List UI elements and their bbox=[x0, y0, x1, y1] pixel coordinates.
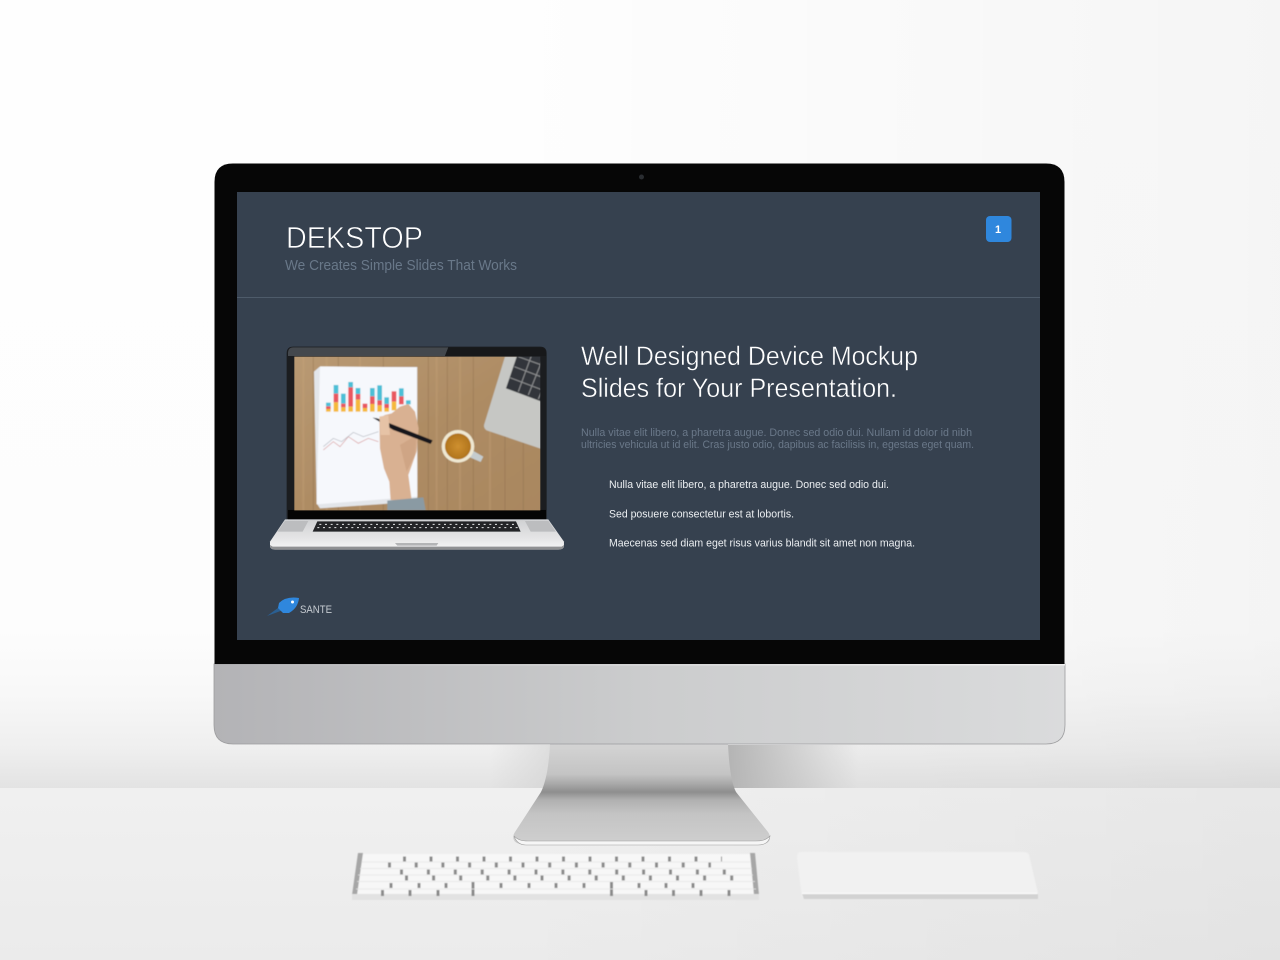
laptop lid bbox=[287, 347, 547, 519]
wireless keyboard bbox=[352, 853, 759, 900]
trackpad bbox=[797, 852, 1038, 899]
line chart bbox=[323, 437, 378, 450]
intro paragraph: ultricies vehicula ut id elit. Cras justo odio, dapibus ac facilisis in, egestas eget quam. bbox=[581, 439, 974, 451]
webcam bbox=[639, 174, 644, 180]
trackpad surface bbox=[797, 852, 1038, 897]
stand body bbox=[513, 744, 770, 844]
feature list bbox=[609, 479, 915, 550]
keyboard edge strips bbox=[352, 853, 759, 895]
photo on laptop screen bbox=[290, 353, 543, 513]
slide heading: Well Designed Device Mockup bbox=[581, 341, 918, 371]
laptop mockup bbox=[270, 347, 564, 550]
page badge bbox=[986, 216, 1012, 242]
slide screen bbox=[237, 192, 1040, 640]
wooden desk bbox=[290, 353, 543, 513]
laptop base bbox=[270, 519, 564, 550]
slide subtitle: We Creates Simple Slides That Works bbox=[285, 258, 517, 274]
coffee cup bbox=[442, 430, 483, 463]
hand with pen bbox=[373, 404, 433, 510]
stand base lip bbox=[514, 836, 770, 845]
stand shadow on wall right bbox=[728, 745, 858, 788]
trackpad edge bbox=[802, 894, 1038, 899]
monitor stand bbox=[490, 744, 858, 845]
feature list: Sed posuere consectetur est at lobortis. bbox=[609, 508, 794, 520]
key row lines bbox=[356, 862, 756, 889]
stacked bar chart bbox=[326, 382, 411, 412]
feature list: Maecenas sed diam eget risus varius blandit sit amet non magna. bbox=[609, 538, 915, 550]
feature list: Nulla vitae elit libero, a pharetra augue. Donec sed odio dui. bbox=[609, 479, 889, 491]
laptop in photo bbox=[484, 355, 542, 449]
paper sheets bbox=[314, 367, 417, 508]
laptop keyboard bbox=[313, 521, 521, 532]
logo bbox=[267, 598, 332, 616]
key gaps bbox=[382, 859, 734, 896]
intro paragraph bbox=[581, 427, 974, 451]
slide title: DEKSTOP bbox=[286, 220, 423, 255]
stand shadow on wall left bbox=[490, 745, 552, 788]
laptop trackpad notch bbox=[395, 543, 438, 546]
page badge: 1 bbox=[995, 224, 1001, 236]
rocket icon bbox=[267, 598, 299, 616]
intro paragraph: Nulla vitae elit libero, a pharetra augue. Donec sed odio dui. Nullam id dolor id nibh bbox=[581, 427, 972, 439]
monitor bbox=[214, 164, 1065, 744]
logo wordmark: SANTE bbox=[300, 604, 332, 616]
laptop lower bezel bbox=[288, 510, 546, 519]
desk surface bbox=[0, 788, 1280, 960]
slide background bbox=[237, 192, 1040, 640]
monitor bezel bbox=[214, 164, 1064, 664]
monitor chin bbox=[214, 664, 1065, 744]
slide heading bbox=[581, 341, 918, 403]
keyboard body bbox=[352, 854, 758, 900]
slide heading: Slides for Your Presentation. bbox=[581, 373, 897, 403]
